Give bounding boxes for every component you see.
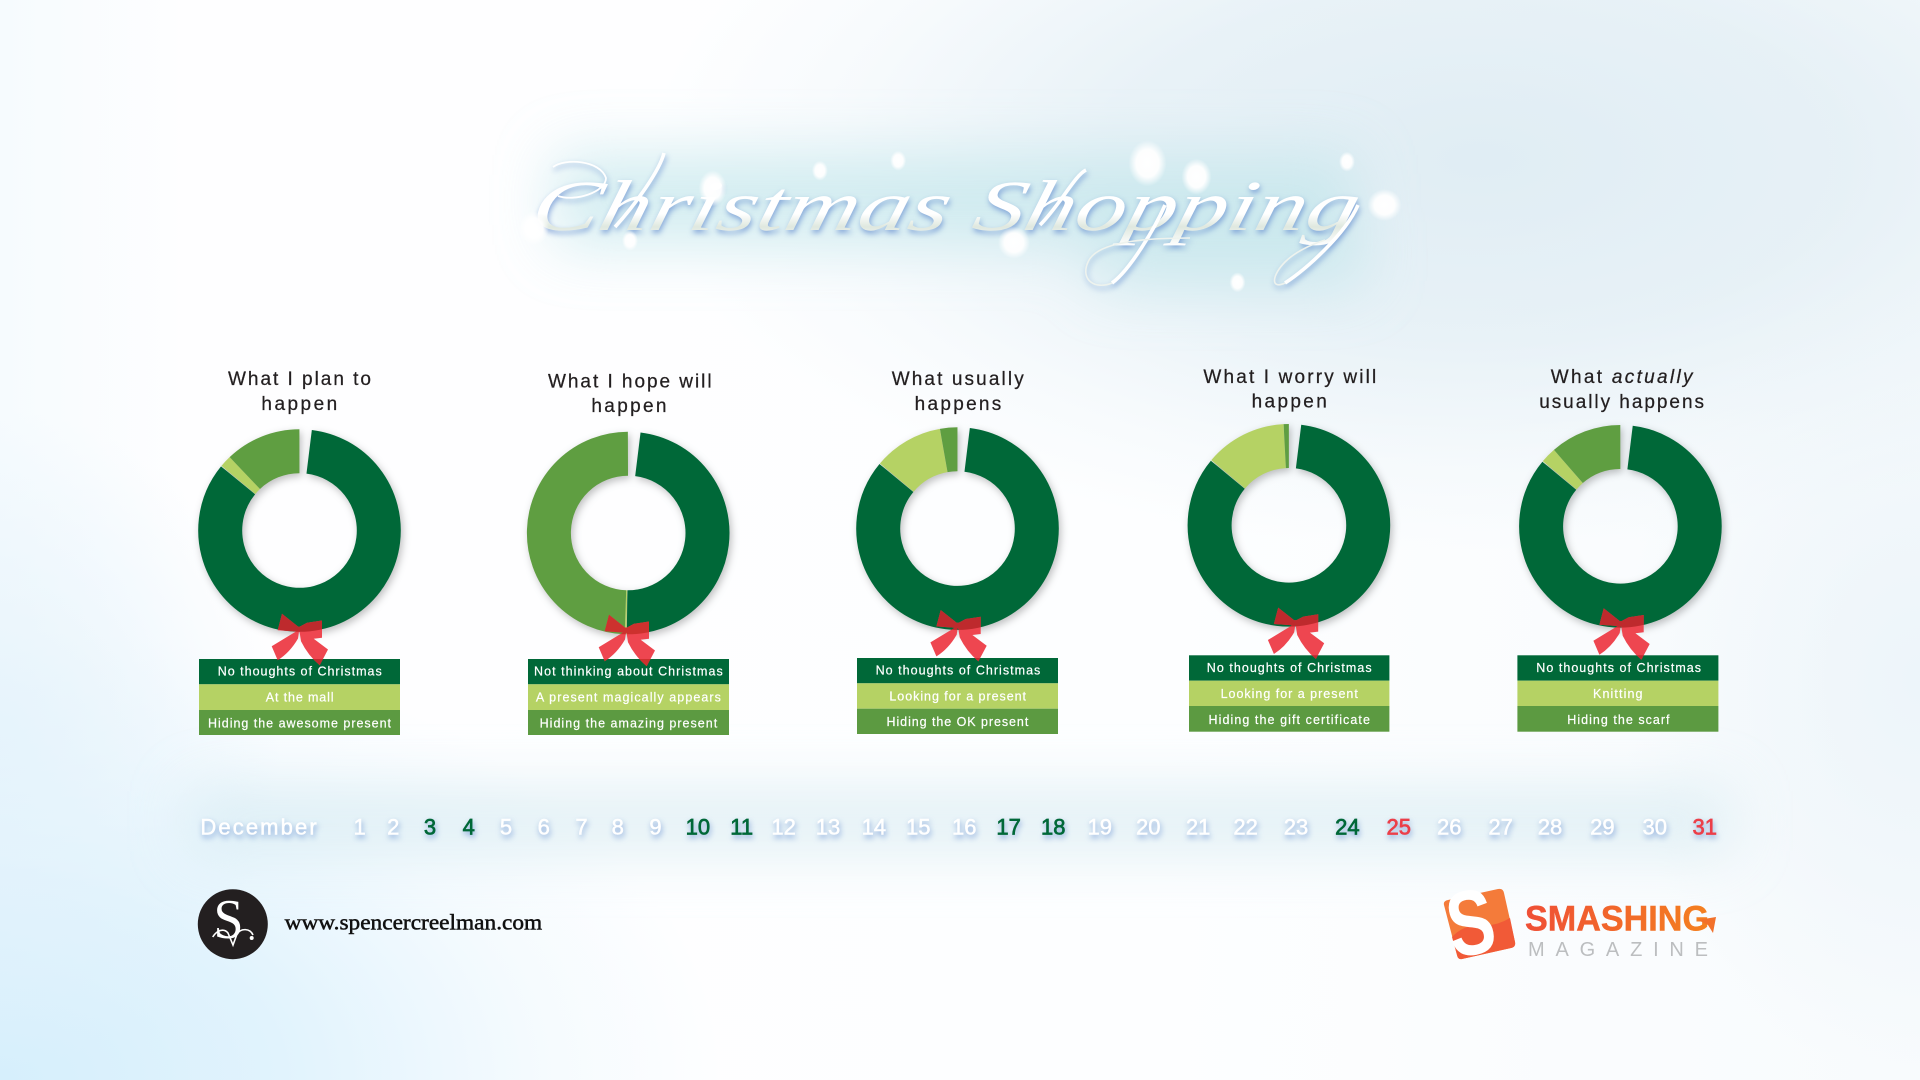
panel: what I worry will happen bbox=[1177, 367, 1401, 732]
calendar strip: 6 bbox=[538, 815, 550, 840]
calendar strip: 9 bbox=[649, 815, 662, 840]
calendar strip: 11 bbox=[730, 815, 753, 840]
heading: happens bbox=[915, 394, 1001, 415]
calendar strip: 5 bbox=[500, 815, 512, 840]
calendar strip: 27 bbox=[1488, 815, 1513, 840]
legend: No thoughts of Christmas bbox=[218, 665, 382, 679]
donut chart bbox=[187, 418, 412, 643]
calendar strip: 3 bbox=[424, 815, 436, 840]
title: Christmas Shopping bbox=[524, 166, 1369, 246]
legend: Looking for a present bbox=[1221, 687, 1358, 701]
wordmark: SMASHING bbox=[1525, 900, 1709, 938]
icon: white S: S bbox=[1439, 869, 1503, 978]
icon: Spencer Creelman logo: S bbox=[214, 889, 244, 951]
panel: what usually happens bbox=[846, 369, 1069, 734]
calendar strip: 23 bbox=[1284, 815, 1308, 840]
panel: what actually usually happens bbox=[1509, 367, 1732, 732]
calendar strip: 19 bbox=[1087, 815, 1112, 840]
legend bbox=[1189, 655, 1389, 732]
snow dots bbox=[519, 140, 1402, 292]
heading: happen bbox=[261, 394, 337, 415]
calendar strip: 14 bbox=[862, 815, 886, 840]
donut chart bbox=[1177, 414, 1401, 637]
calendar strip: 22 bbox=[1233, 815, 1258, 840]
calendar strip: 10 bbox=[686, 815, 710, 840]
legend: Hiding the awesome present bbox=[208, 716, 392, 730]
calendar strip: 13 bbox=[816, 815, 840, 840]
panel: what I hope will happen bbox=[528, 371, 729, 735]
heading: usually happens bbox=[1539, 392, 1704, 413]
donut chart bbox=[846, 417, 1069, 640]
calendar strip: 7 bbox=[575, 815, 588, 840]
icon: card lower shade bbox=[1452, 918, 1515, 959]
calendar strip: 17 bbox=[996, 815, 1021, 840]
calendar strip: 21 bbox=[1186, 815, 1210, 840]
icon: red bow bbox=[930, 610, 987, 661]
calendar strip: 28 bbox=[1538, 815, 1562, 840]
heading: What I worry will bbox=[1203, 367, 1376, 388]
calendar strip: 16 bbox=[952, 815, 976, 840]
calendar strip: December bbox=[200, 815, 317, 840]
title bbox=[524, 153, 1369, 285]
legend bbox=[857, 658, 1058, 734]
legend bbox=[1517, 655, 1718, 732]
calendar strip: 25 bbox=[1387, 815, 1411, 840]
icon: orange card bbox=[1444, 889, 1515, 959]
heading: What I hope will bbox=[548, 371, 712, 392]
calendar strip: 12 bbox=[771, 815, 796, 840]
calendar strip: 24 bbox=[1335, 815, 1360, 840]
legend bbox=[528, 659, 729, 735]
calendar strip: 15 bbox=[906, 815, 931, 840]
legend: No thoughts of Christmas bbox=[1536, 661, 1701, 675]
calendar strip: 30 bbox=[1642, 815, 1667, 840]
wordmark sub: MAGAZINE bbox=[1528, 939, 1708, 961]
legend: A present magically appears bbox=[536, 690, 721, 704]
icon: red bow bbox=[599, 615, 655, 666]
calendar strip: 4 bbox=[463, 815, 475, 840]
legend: Hiding the scarf bbox=[1567, 713, 1670, 727]
legend: At the mall bbox=[266, 690, 334, 704]
heading: What I plan to bbox=[228, 369, 371, 390]
calendar strip: 1 bbox=[353, 815, 366, 840]
heading: happen bbox=[591, 396, 666, 417]
legend: No thoughts of Christmas bbox=[1207, 661, 1372, 675]
legend: No thoughts of Christmas bbox=[876, 664, 1040, 678]
calendar strip: 31 bbox=[1692, 815, 1717, 840]
heading: What actually bbox=[1551, 367, 1692, 388]
donut chart bbox=[540, 445, 717, 621]
icon: wordmark arrow bbox=[1698, 917, 1716, 933]
icon: Spencer Creelman logo bbox=[198, 889, 268, 959]
infographic bbox=[196, 143, 1728, 960]
calendar strip: 18 bbox=[1041, 815, 1065, 840]
panel: what I plan to happen bbox=[187, 369, 412, 735]
calendar strip: 26 bbox=[1437, 815, 1461, 840]
calendar strip bbox=[200, 815, 1717, 840]
legend: Looking for a present bbox=[889, 690, 1027, 704]
legend: Hiding the amazing present bbox=[540, 716, 718, 730]
calendar strip: 2 bbox=[387, 815, 399, 840]
legend: Hiding the gift certificate bbox=[1208, 713, 1370, 727]
legend: Knitting bbox=[1593, 687, 1643, 701]
legend bbox=[199, 659, 400, 735]
icon: red bow bbox=[272, 614, 328, 665]
legend: Not thinking about Christmas bbox=[534, 665, 723, 679]
icon: red bow bbox=[1593, 608, 1650, 660]
heading: What usually bbox=[892, 369, 1024, 390]
website url: www.spencercreelman.com bbox=[285, 910, 542, 934]
icon: red bow bbox=[1268, 608, 1324, 659]
Smashing Magazine logo bbox=[1439, 869, 1716, 978]
heading: happen bbox=[1252, 392, 1327, 413]
calendar strip: 29 bbox=[1590, 815, 1615, 840]
legend: Hiding the OK present bbox=[886, 715, 1029, 729]
calendar strip: 20 bbox=[1136, 815, 1160, 840]
calendar strip: 8 bbox=[612, 815, 624, 840]
donut chart bbox=[1509, 414, 1732, 638]
